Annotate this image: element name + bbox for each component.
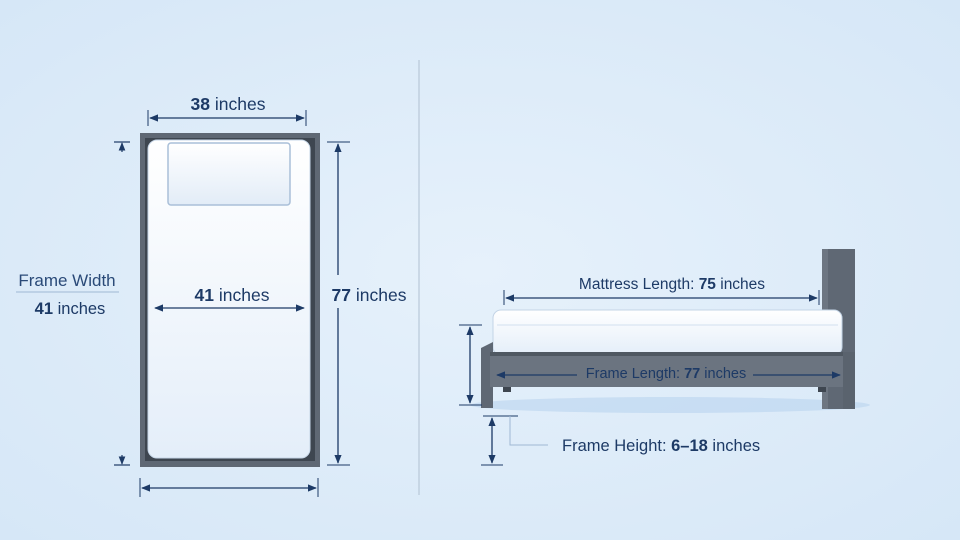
frame width label: Frame Width [18,271,116,290]
pillow [168,143,290,205]
frame width label [16,271,119,318]
left height arrow [459,325,482,405]
side view bed [470,249,870,413]
frame length: Frame Length: 77 inches [586,366,746,382]
bottom arrow [140,478,318,497]
label: 38 inches: 38 inches [191,94,266,114]
frame width label: 41 inches [35,300,105,318]
frame height [481,416,760,465]
77 inches: 77 inches [332,285,407,305]
mattress length: Mattress Length: 75 inches [579,276,765,293]
left ticks [114,142,130,465]
frame height: Frame Height: 6–18 inches [562,437,760,455]
inner 41 inches: 41 inches [195,285,270,305]
top view bed [140,133,320,467]
